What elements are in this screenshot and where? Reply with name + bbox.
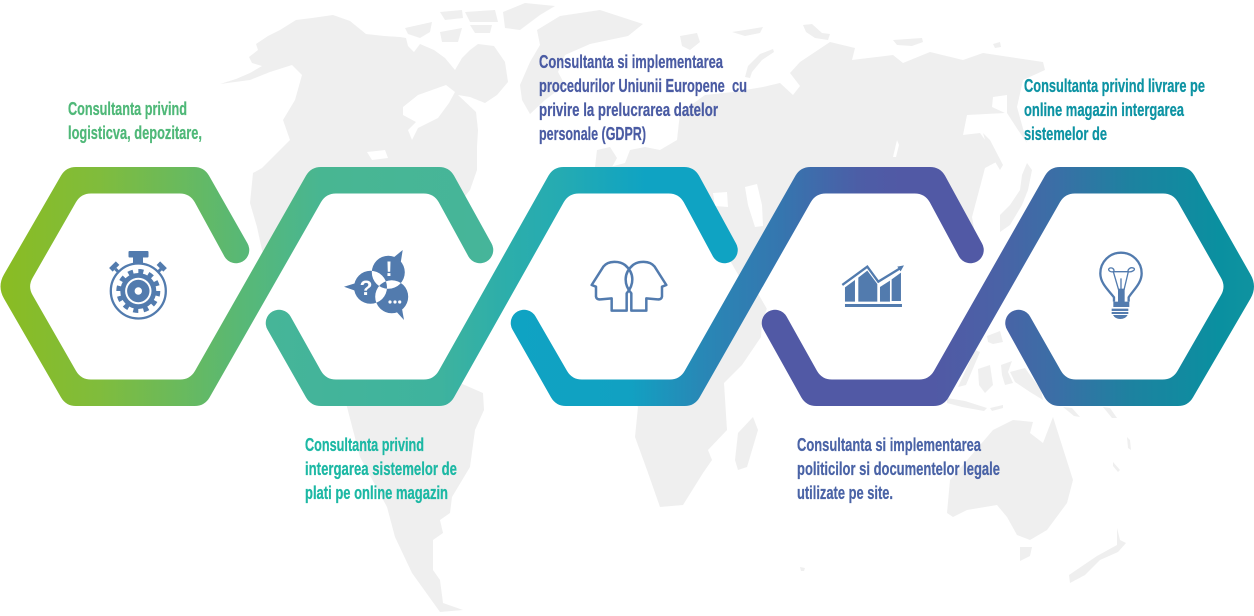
text: payment systems consulting: intergarea sistemelor de <box>305 459 457 479</box>
white hexagon interiors <box>10 180 1240 393</box>
text: payment systems consulting: Consultanta privind <box>305 435 424 455</box>
icon: two interlocking heads <box>592 262 666 311</box>
text: payment systems consulting <box>305 435 457 503</box>
text: payment systems consulting: plati pe online magazin <box>305 483 448 503</box>
icon: three overlapping speech bubbles <box>344 250 408 320</box>
text: legal policies consulting: utilizate pe site. <box>797 483 893 503</box>
text: legal policies consulting: politicilor si documentelor legale <box>797 459 1000 479</box>
icon: three overlapping speech bubbles: ? <box>360 277 372 300</box>
text: delivery consulting: sistemelor de <box>1024 124 1107 144</box>
text: GDPR consulting: privire la prelucrarea datelor <box>539 100 718 120</box>
icon: three overlapping speech bubbles: ! <box>386 258 392 281</box>
text: legal policies consulting <box>797 435 1000 503</box>
text: logistics consulting: Consultanta privind <box>68 99 187 119</box>
text: logistics consulting <box>68 99 202 143</box>
text: GDPR consulting: Consultanta si implementarea <box>539 52 724 72</box>
band: first hexagon linking to second <box>0 167 493 406</box>
world map background <box>220 3 1131 612</box>
text: GDPR consulting: procedurilor Uniunii Europene cu <box>539 76 747 96</box>
icon: stopwatch with gear <box>109 251 167 318</box>
text: GDPR consulting: personale (GDPR) <box>539 124 646 144</box>
icon: rising area chart with arrow <box>842 265 904 307</box>
band: second hexagon linking to third <box>266 167 738 406</box>
text: GDPR consulting <box>539 52 747 144</box>
band: fourth hexagon linking to fifth <box>762 167 1254 406</box>
band: third hexagon linking to fourth <box>511 167 984 406</box>
text: delivery consulting: online magazin intergarea <box>1024 100 1185 120</box>
icon: light bulb <box>1100 253 1142 319</box>
text: delivery consulting <box>1024 76 1205 144</box>
text: logistics consulting: logisticva, depozitare, <box>68 123 202 143</box>
text: legal policies consulting: Consultanta si implementarea <box>797 435 982 455</box>
